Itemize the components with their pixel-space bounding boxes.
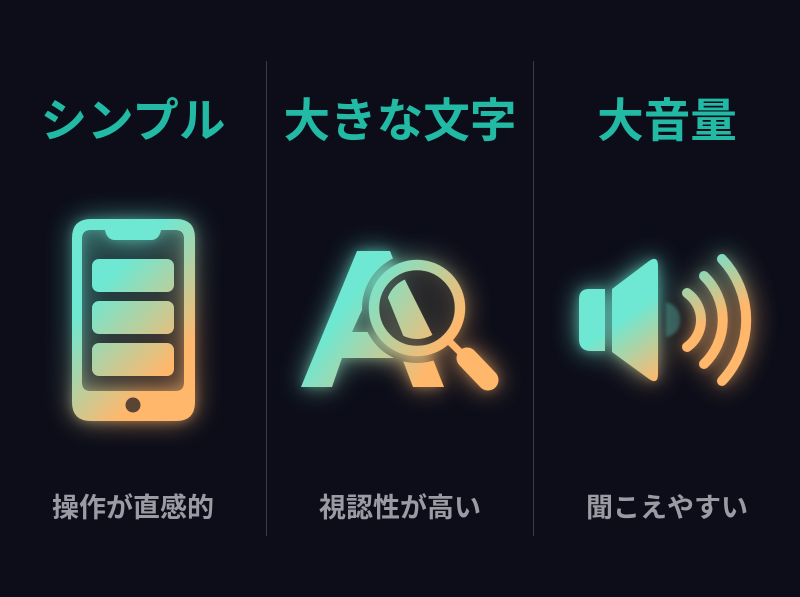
title: simple: シンプル: [40, 95, 225, 147]
magnifier handle: [450, 342, 488, 380]
magnifier ring: [374, 265, 460, 351]
caption: intuitive: 操作が直感的: [52, 493, 214, 523]
A seen through lens: [388, 280, 432, 339]
list row 1: [92, 259, 174, 292]
button: home: [126, 398, 140, 412]
center pulse: [666, 302, 680, 337]
icon: speaker: [579, 259, 746, 381]
caption: legible: 視認性が高い: [319, 493, 481, 523]
icon: smartphone: [72, 219, 195, 421]
list row 2: [92, 301, 174, 334]
speaker cone: [579, 259, 658, 381]
icon: letter A with magnifier: [301, 251, 488, 387]
sound waves: [687, 259, 746, 381]
letter A: [301, 251, 444, 387]
list row 3: [92, 343, 174, 376]
caption: easy to hear: 聞こえやすい: [586, 493, 748, 523]
title: loud volume: 大音量: [597, 95, 737, 147]
title: large text: 大きな文字: [284, 95, 516, 147]
